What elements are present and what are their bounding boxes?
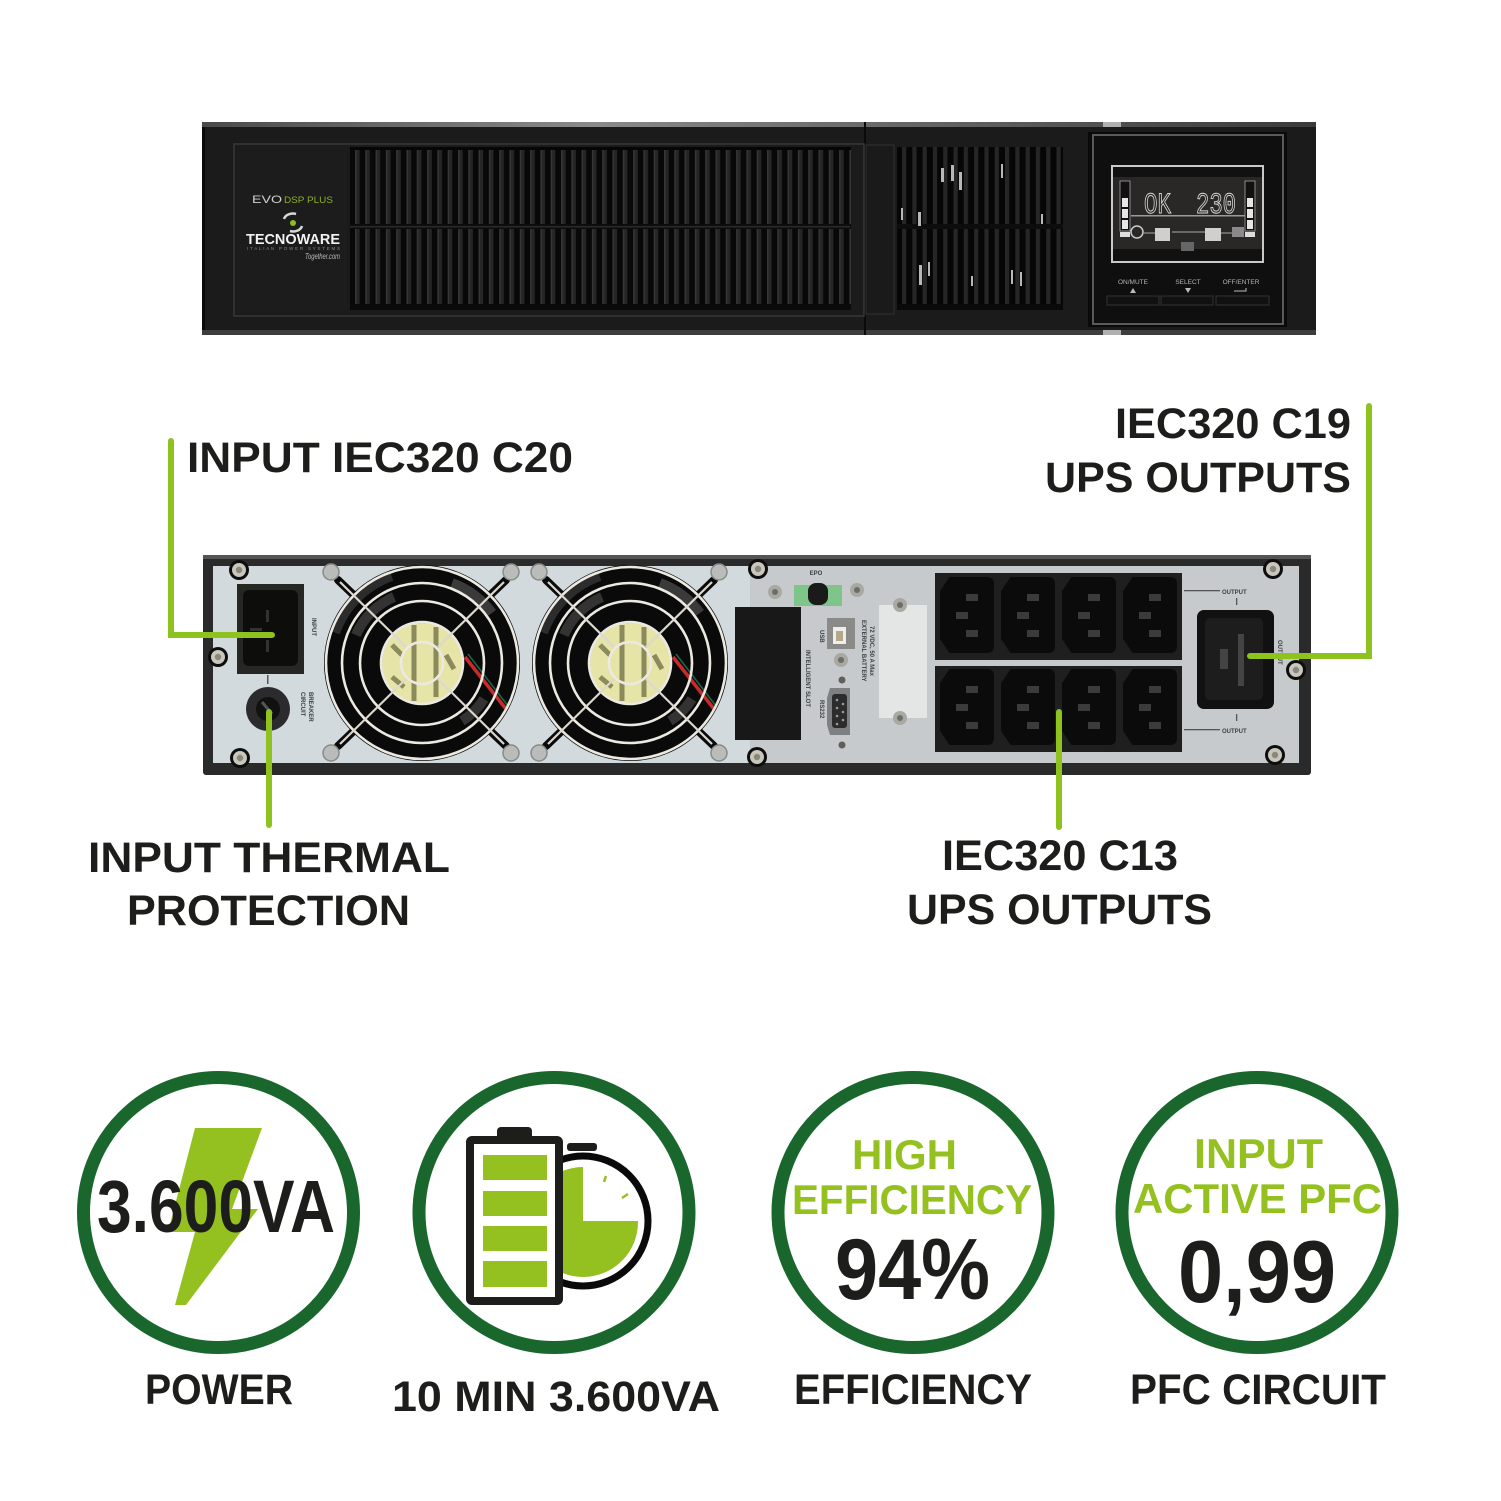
callout line: input C20 <box>171 441 272 635</box>
value: 94%: 94% <box>835 1222 990 1318</box>
button labels: SELECT <box>1175 279 1201 286</box>
label: input thermal protection <box>88 834 450 935</box>
sockets: IEC320 C13 bottom row <box>935 666 1182 752</box>
text: EVO DSP PLUS: DSP PLUS <box>284 195 333 205</box>
grille: right <box>897 147 1063 310</box>
text: output marks <box>1184 590 1282 735</box>
text: 230: 230 <box>1196 189 1236 223</box>
panel: UPS rear view <box>203 555 1311 775</box>
caption: runtime: 10 MIN 3.600VA <box>392 1373 720 1421</box>
circuit breaker <box>246 675 290 731</box>
heading: high efficiency <box>792 1131 1032 1223</box>
grille: main <box>350 147 851 310</box>
text: circuit breaker label <box>299 692 313 722</box>
USB port <box>818 618 855 667</box>
text: output marks: OUTPUT <box>1276 640 1282 665</box>
caption: power: POWER <box>145 1366 293 1414</box>
text: OK: OK <box>1144 189 1171 223</box>
text: output marks: OUTPUT <box>1222 729 1247 735</box>
icon: stopwatch <box>518 1143 648 1286</box>
text: circuit breaker label: CIRCUIT <box>299 692 305 717</box>
heading: high efficiency: EFFICIENCY <box>792 1176 1032 1223</box>
buttons <box>1107 296 1269 305</box>
EPO connector: EPO <box>810 571 823 577</box>
label: C19 UPS outputs <box>1045 400 1351 502</box>
label: C19 UPS outputs: IEC320 C19 <box>1115 400 1351 448</box>
text: intelligent slot label: INTELLIGENT SLOT <box>804 650 810 707</box>
icon: battery <box>470 1127 559 1301</box>
fan 2 <box>531 564 728 761</box>
button labels: OFF/ENTER <box>1223 279 1260 286</box>
value: 3.600VA: 3.600VA <box>97 1165 335 1248</box>
value: 0,99: 0,99 <box>1178 1222 1336 1321</box>
corner screws <box>208 559 1306 768</box>
callout line: thermal protection <box>266 712 272 825</box>
intelligent slot <box>735 607 801 740</box>
door piece <box>866 145 894 314</box>
text: INPUT rear label: INPUT <box>310 618 316 636</box>
ring <box>778 1078 1048 1348</box>
badge: PFC <box>1122 1078 1392 1414</box>
logo plate <box>237 145 347 313</box>
label: C19 UPS outputs: UPS OUTPUTS <box>1045 454 1351 502</box>
heading: input active PFC <box>1133 1130 1382 1222</box>
LCD screen <box>1112 166 1263 262</box>
rear plate <box>213 566 1299 763</box>
caption: PFC circuit: PFC CIRCUIT <box>1130 1366 1386 1414</box>
sockets: IEC320 C13 top row <box>935 573 1182 660</box>
panel: UPS front view <box>202 122 1316 335</box>
text: EVO DSP PLUS <box>252 194 333 206</box>
label: C13 UPS outputs <box>907 832 1212 934</box>
badge: runtime <box>392 1078 720 1421</box>
EPO connector <box>768 571 864 606</box>
icon: lightning bolt <box>168 1128 262 1305</box>
icon: Tecnoware swirl <box>284 214 302 231</box>
socket: IEC320 C19 output <box>1197 610 1274 709</box>
heading: input active PFC: INPUT <box>1194 1130 1323 1177</box>
serial port: RS232 <box>818 700 824 719</box>
button labels: ON/MUTE <box>1118 279 1149 286</box>
front chassis <box>202 122 1316 335</box>
serial port <box>818 676 850 748</box>
heading: high efficiency: HIGH <box>852 1131 957 1178</box>
text: external battery label: EXTERNAL BATTERY <box>860 620 866 682</box>
text: tagline: ITALIAN POWER SYSTEMS <box>247 246 340 251</box>
badge: efficiency <box>778 1078 1048 1414</box>
text: Tecnoware logo: TECNOWARE <box>246 231 340 248</box>
text: circuit breaker label: BREAKER <box>307 692 313 722</box>
callout line: C13 outputs <box>1056 712 1062 827</box>
USB port: USB <box>818 630 824 643</box>
label: input thermal protection: INPUT THERMAL <box>88 834 450 882</box>
ring <box>84 1078 354 1348</box>
ring <box>1122 1078 1392 1348</box>
text: output marks: OUTPUT <box>1222 590 1247 596</box>
text: EVO DSP PLUS: EVO <box>252 194 283 206</box>
label: input C20: INPUT IEC320 C20 <box>187 434 573 482</box>
label: input thermal protection: PROTECTION <box>127 887 410 935</box>
text: external battery label: 72 VDC, 50 A Max <box>868 626 874 677</box>
rear chassis <box>203 555 1311 775</box>
text: external battery label <box>860 620 874 682</box>
ring <box>419 1078 689 1348</box>
heading: input active PFC: ACTIVE PFC <box>1133 1175 1382 1222</box>
blank plate <box>879 598 927 725</box>
button labels <box>1118 279 1260 293</box>
label: C13 UPS outputs: IEC320 C13 <box>942 832 1178 880</box>
socket: IEC320 C20 input <box>237 584 304 674</box>
caption: efficiency: EFFICIENCY <box>794 1366 1032 1414</box>
text: together: Together.com <box>305 252 340 261</box>
callout line: C19 outputs <box>1250 406 1369 656</box>
badge: power <box>84 1078 354 1414</box>
label: C13 UPS outputs: UPS OUTPUTS <box>907 886 1212 934</box>
fan 1 <box>323 564 520 761</box>
control panel <box>1088 122 1287 335</box>
